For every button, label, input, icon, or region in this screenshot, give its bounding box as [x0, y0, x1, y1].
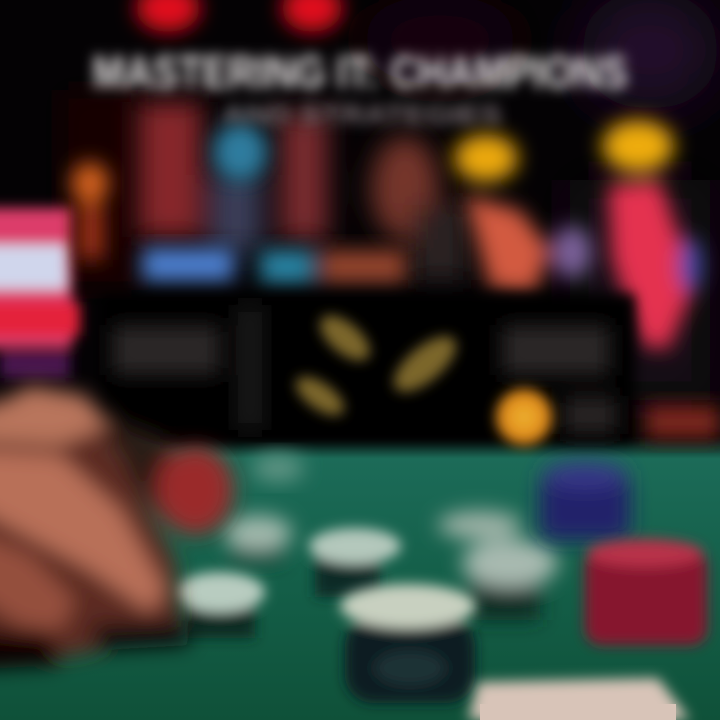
chip: blue stack: [540, 462, 630, 540]
hand: [0, 385, 233, 670]
coloured bars: [142, 248, 406, 283]
chip: front white stack: [340, 584, 476, 703]
gold coin: [496, 389, 552, 445]
gold badge and red ribbon: [602, 120, 702, 350]
chip: red stack: [585, 539, 707, 645]
central figures panel: [138, 102, 467, 280]
poker chips: [175, 454, 707, 703]
gold badge and orange figure: [454, 134, 592, 292]
chip: white left: [224, 515, 292, 562]
panel text smudges: [112, 305, 617, 434]
right red block: [645, 405, 720, 439]
chip: white near hand: [175, 572, 265, 638]
top red lights: [136, 0, 342, 32]
chip: white stack right: [438, 511, 558, 620]
title: MASTERING IT: CHAMPIONS: [92, 46, 628, 98]
playing card: [468, 678, 690, 720]
left orange marker: [71, 162, 109, 260]
poker table felt: [0, 436, 720, 720]
gold leaf icons: [290, 307, 465, 423]
chip: white centre: [309, 528, 401, 597]
dark info panels: [100, 294, 635, 442]
left flag: [0, 208, 80, 378]
blue orb: [212, 122, 268, 182]
title: [92, 46, 628, 130]
title: AND STRATEGIES: [222, 99, 502, 130]
chip: top small: [252, 454, 304, 482]
